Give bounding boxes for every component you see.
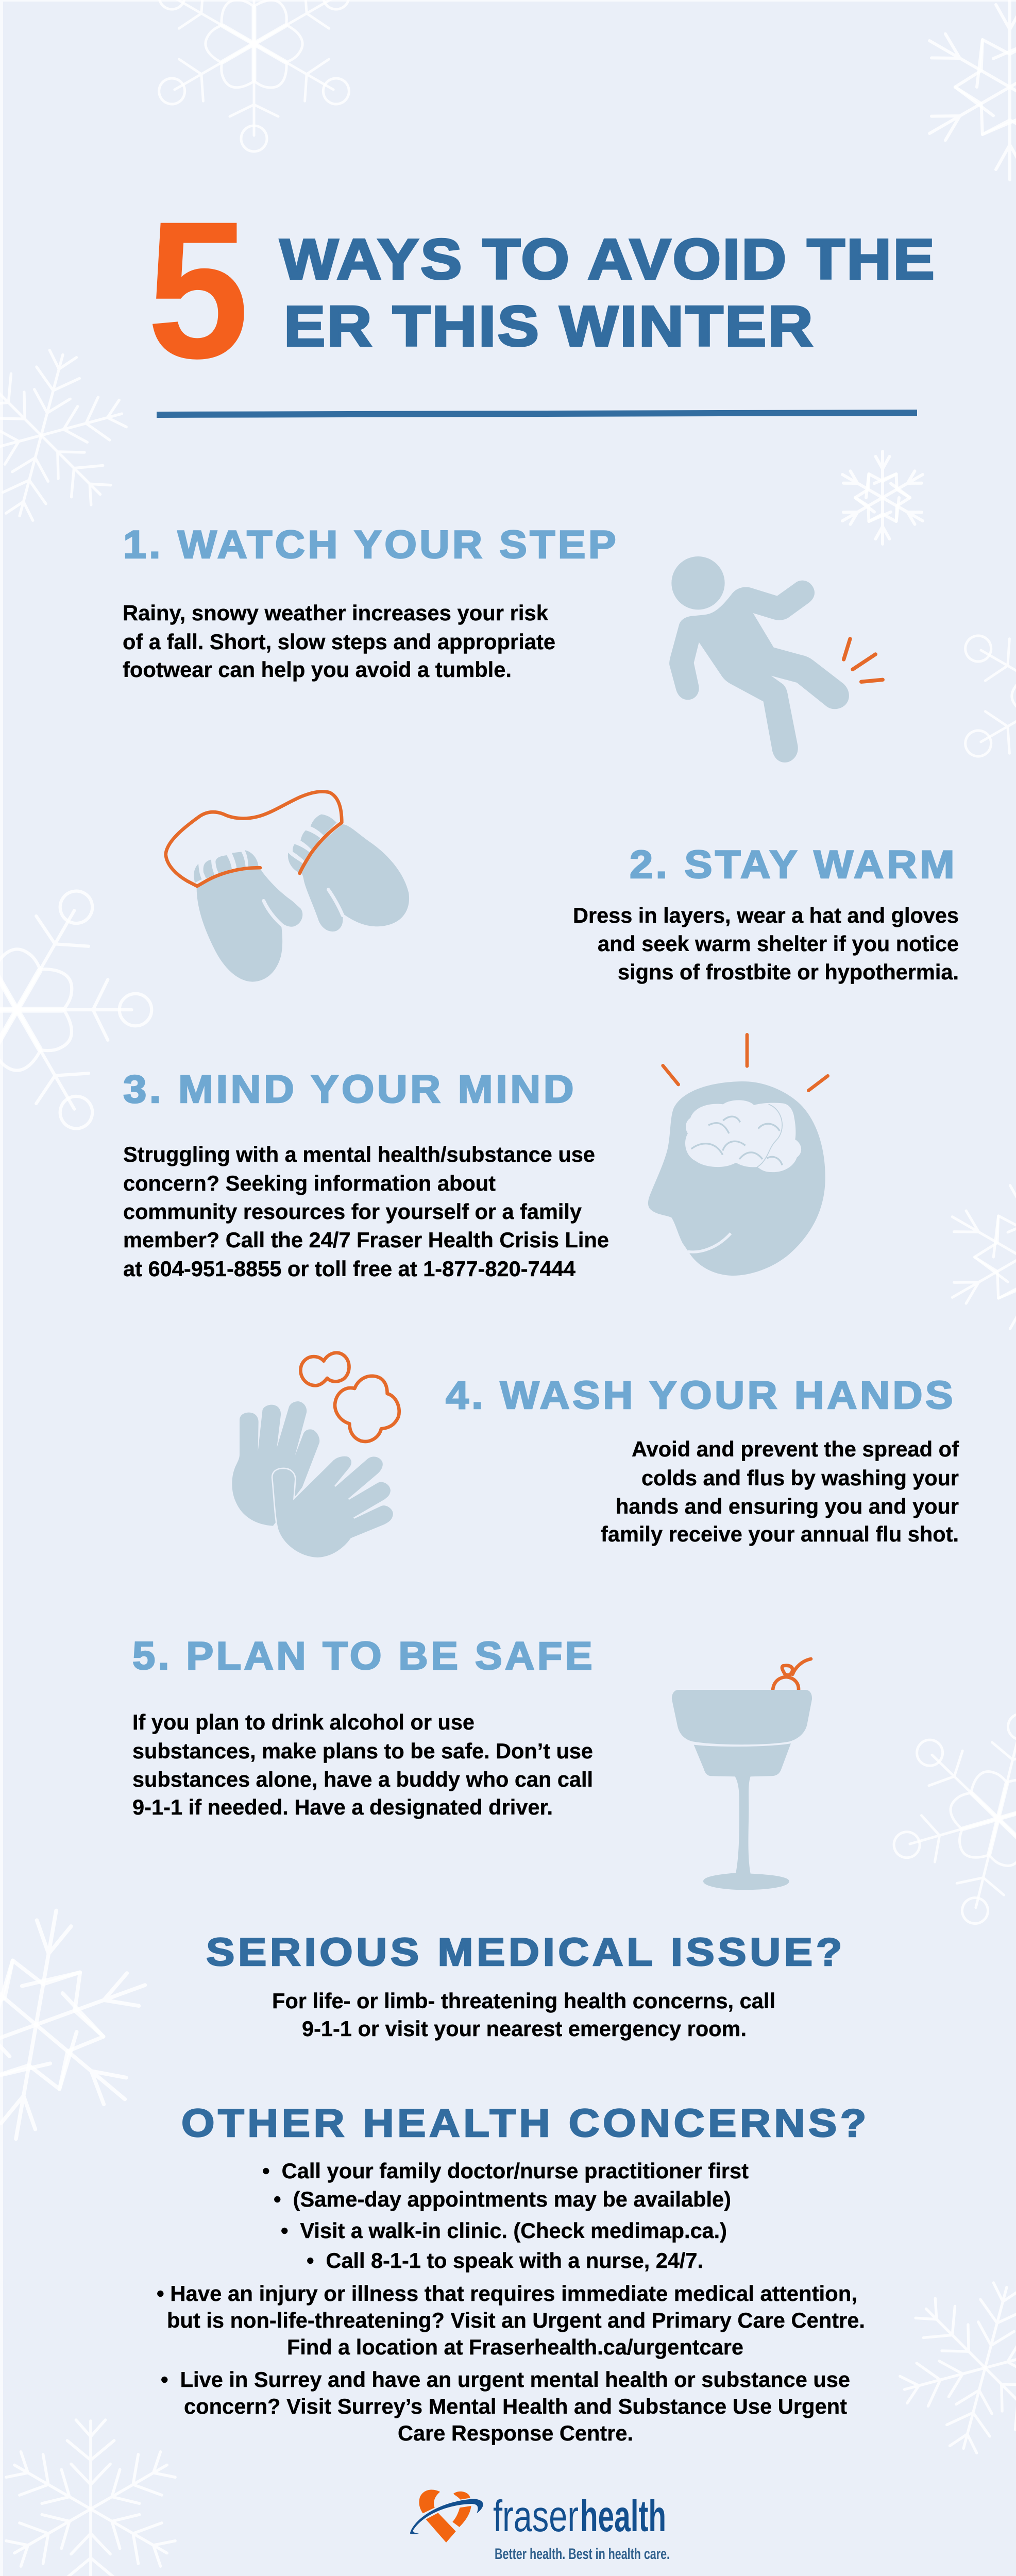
body 1: of a fall. Short, slow steps and appropriate	[123, 630, 555, 654]
heading 1: 1. WATCH YOUR STEP	[123, 523, 619, 567]
body 3	[123, 1142, 609, 1281]
body 4	[601, 1437, 959, 1546]
body 4: Avoid and prevent the spread of	[632, 1437, 959, 1461]
snowflake left upper	[0, 332, 144, 539]
body 2: Dress in layers, wear a hat and gloves	[573, 903, 959, 927]
list: health options: • Call your family doctor/nurse practitioner first	[262, 2159, 749, 2183]
body 5: substances, make plans to be safe. Don’t use	[132, 1739, 593, 1763]
list: health options: Care Response Centre.	[398, 2421, 633, 2445]
text: emergency advice	[272, 1989, 775, 2041]
snowflake left lower	[0, 1890, 175, 2160]
body 3: member? Call the 24/7 Fraser Health Crisis Line	[123, 1228, 609, 1252]
list: health options	[157, 2159, 865, 2445]
body 2	[573, 903, 959, 984]
snowflake small right	[834, 451, 931, 544]
icon: mittens	[166, 791, 409, 982]
icon: logo heart	[410, 2489, 483, 2543]
snowflake right rings	[951, 588, 1016, 804]
snowflake right lower rings	[866, 1688, 1016, 1950]
text: emergency advice: For life- or limb- threatening health concerns, call	[272, 1989, 775, 2013]
section 3: mind your mind	[123, 1067, 609, 1281]
section 5: plan to be safe	[132, 1634, 595, 1819]
heading 4: 4. WASH YOUR HANDS	[446, 1374, 956, 1417]
icon: cocktail glass	[672, 1659, 812, 1890]
body 3: at 604-951-8855 or toll free at 1-877-820-7444	[123, 1257, 575, 1281]
list: health options: • Visit a walk-in clinic. (Check medimap.ca.)	[281, 2218, 727, 2243]
body 4: family receive your annual flu shot.	[601, 1522, 959, 1546]
list: health options: but is non-life-threatening? Visit an Urgent and Primary Care Centre.	[167, 2308, 865, 2332]
snowflake top right	[913, 0, 1016, 180]
body 5: substances alone, have a buddy who can call	[132, 1767, 593, 1791]
list: health options: • Call 8-1-1 to speak with a nurse, 24/7.	[307, 2248, 703, 2273]
heading 2: 2. STAY WARM	[630, 843, 957, 887]
section 1: watch your step	[123, 523, 619, 682]
body 4: colds and flus by washing your	[641, 1466, 959, 1490]
title	[280, 228, 936, 358]
section: serious medical issue	[206, 1930, 845, 2041]
title: WAYS TO AVOID THE	[280, 228, 936, 291]
icon: person slipping	[669, 556, 883, 762]
logo wordmark: health	[580, 2492, 666, 2541]
heading: other health concerns: OTHER HEALTH CONCERNS?	[181, 2102, 870, 2145]
body 3: community resources for yourself or a family	[123, 1199, 582, 1224]
body 2: signs of frostbite or hypothermia.	[618, 960, 959, 984]
icon: hands and soap bubbles	[232, 1353, 399, 1558]
text: emergency advice: 9-1-1 or visit your nearest emergency room.	[302, 2016, 747, 2041]
section: other health concerns	[157, 2102, 870, 2445]
body 2: and seek warm shelter if you notice	[598, 931, 959, 956]
snowflake top centre	[144, 0, 364, 151]
body 1	[123, 601, 555, 682]
heading: serious medical issue: SERIOUS MEDICAL ISSUE?	[206, 1930, 845, 1974]
logo wordmark: fraser	[493, 2492, 579, 2541]
title numeral 5: 5	[147, 181, 249, 399]
section 2: stay warm	[573, 843, 959, 984]
body 5: If you plan to drink alcohol or use	[132, 1710, 475, 1734]
section 4: wash your hands	[446, 1374, 959, 1546]
logo: fraser health	[410, 2489, 670, 2563]
body 5	[132, 1710, 593, 1819]
icon: head with brain	[648, 1035, 828, 1276]
body 3: concern? Seeking information about	[123, 1171, 496, 1195]
body 3: Struggling with a mental health/substance use	[123, 1142, 595, 1166]
heading 3: 3. MIND YOUR MIND	[123, 1067, 577, 1111]
snowflake left bottom	[2, 2420, 180, 2576]
list: health options: Find a location at Fraserhealth.ca/urgentcare	[287, 2335, 743, 2359]
title: ER THIS WINTER	[284, 295, 815, 358]
body 5: 9-1-1 if needed. Have a designated driver.	[132, 1795, 553, 1819]
list: health options: concern? Visit Surrey’s Mental Health and Substance Use Urgent	[184, 2394, 847, 2418]
title rule	[157, 410, 917, 418]
snowflake left rings	[0, 825, 203, 1195]
body 4: hands and ensuring you and your	[616, 1494, 959, 1518]
snowflake right middle	[938, 1176, 1016, 1338]
list: health options: • Live in Surrey and have an urgent mental health or substance use	[161, 2367, 850, 2392]
list: health options: • Have an injury or illness that requires immediate medical attention,	[157, 2281, 857, 2306]
snowflake right bottom	[882, 2264, 1016, 2471]
list: health options: • (Same-day appointments may be available)	[274, 2187, 731, 2211]
body 1: Rainy, snowy weather increases your risk	[123, 601, 549, 625]
body 1: footwear can help you avoid a tumble.	[123, 657, 512, 682]
logo tagline: Better health. Best in health care.	[495, 2546, 670, 2563]
heading 5: 5. PLAN TO BE SAFE	[132, 1634, 595, 1678]
